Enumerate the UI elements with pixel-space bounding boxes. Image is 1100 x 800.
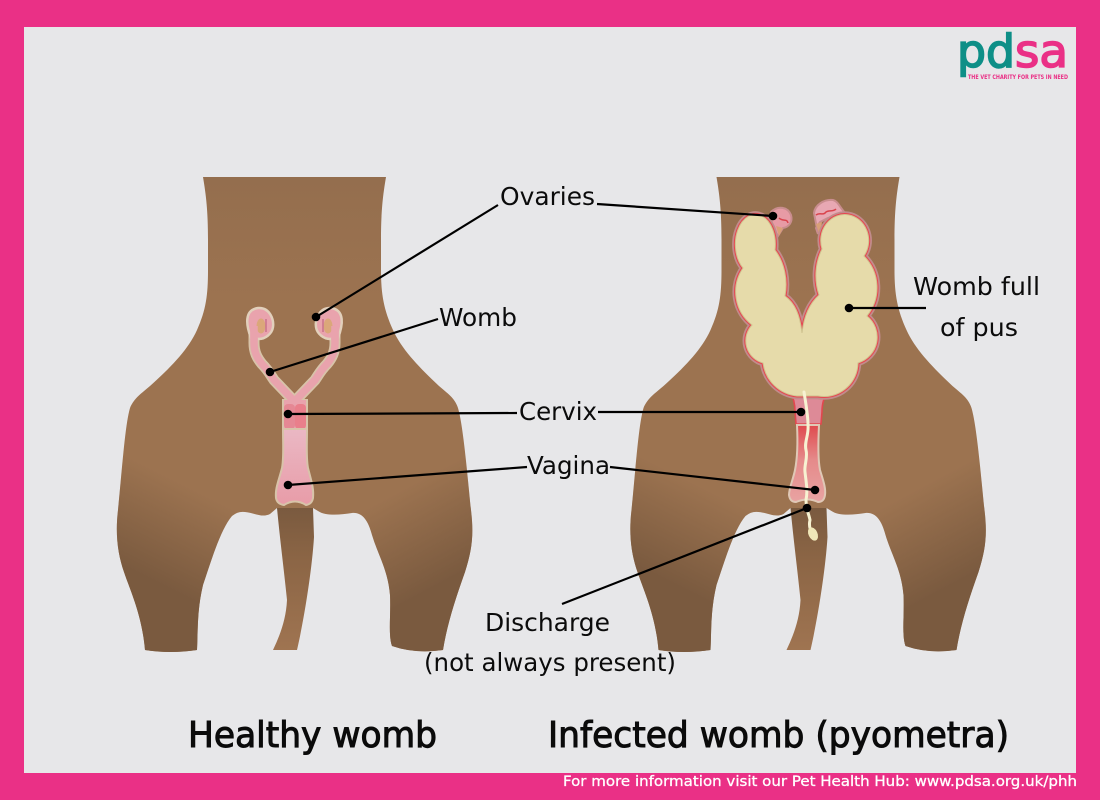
- label: womb full of pus: of pus: [940, 313, 1018, 342]
- logo: PDSA: THE VET CHARITY FOR PETS IN NEED: [968, 74, 1068, 81]
- label: discharge: [424, 608, 676, 677]
- label: cervix: Cervix: [519, 397, 597, 426]
- label: discharge: Discharge: [485, 608, 610, 637]
- logo: PDSA: pd: [957, 25, 1015, 78]
- leader dots: [266, 212, 853, 512]
- womb horns inner lining: [254, 326, 335, 429]
- discharge of pus: [804, 392, 815, 538]
- healthy womb anatomy: [247, 308, 342, 505]
- heading: healthy womb: Healthy womb: [188, 715, 437, 756]
- vagina: [276, 429, 313, 505]
- label: ovaries: Ovaries: [500, 182, 595, 211]
- label: womb full of pus: Womb full: [913, 272, 1040, 301]
- logo: PDSA: [957, 25, 1068, 81]
- left ovary: [247, 308, 273, 340]
- label: womb: Womb: [439, 303, 517, 332]
- neck and cervix: [790, 392, 828, 424]
- footer note: For more information visit our Pet Health Hub: www.pdsa.org.uk/phh: [563, 774, 1077, 790]
- healthy dog body silhouette: [100, 170, 490, 660]
- infected dog body silhouette: [614, 170, 1004, 660]
- pus-filled womb: [735, 214, 877, 397]
- leader lines: [270, 204, 926, 604]
- left swollen ovary: [771, 208, 792, 236]
- label: womb full of pus: [913, 272, 1040, 342]
- heading: infected womb: Infected womb (pyometra): [548, 715, 1009, 756]
- womb horns outer wall: [254, 326, 335, 429]
- cervix: [284, 404, 306, 429]
- infected womb anatomy: [735, 200, 877, 542]
- right swollen ovary: [814, 200, 846, 236]
- label: vagina: Vagina: [527, 451, 610, 480]
- label: discharge: (not always present): [424, 648, 676, 677]
- logo: PDSA: sa: [1015, 25, 1068, 78]
- discharge droplet: [806, 526, 820, 542]
- right ovary: [316, 308, 342, 340]
- vagina with red inflammation: [789, 425, 825, 502]
